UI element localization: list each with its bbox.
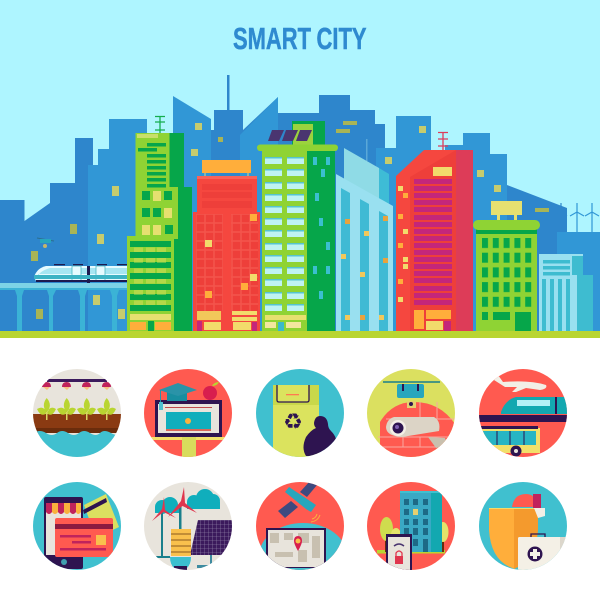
train (501, 397, 567, 414)
icon: drone and security camera (367, 369, 455, 457)
icon: smart farming (33, 369, 121, 457)
delivery drone (37, 238, 54, 248)
light bulb (170, 529, 191, 570)
apple (203, 382, 219, 400)
drone (383, 382, 440, 408)
ground strip (0, 331, 600, 338)
seedlings (37, 398, 116, 420)
sky background (0, 0, 600, 338)
satellite (278, 481, 320, 522)
red tower with stripes (396, 132, 473, 331)
bus (479, 426, 540, 456)
glass tower (336, 148, 393, 331)
helmet (512, 494, 545, 518)
icon: GPS satellite and map (256, 482, 344, 570)
small green office (473, 201, 540, 331)
first aid case (518, 534, 568, 570)
pale blue low building (539, 254, 593, 331)
icon: renewable energy (144, 482, 233, 570)
title: CITY (316, 22, 366, 56)
wind turbines (152, 487, 197, 558)
credit card (55, 518, 113, 557)
map tablet (266, 528, 326, 568)
shield (489, 508, 538, 569)
antenna (155, 116, 165, 133)
monorail train (34, 264, 128, 283)
icon: mobile commerce (33, 482, 121, 570)
wind turbines (555, 203, 599, 232)
graduation cap (159, 383, 197, 410)
clouds (155, 489, 220, 514)
solar panels (190, 520, 233, 568)
plane (494, 375, 546, 392)
solar-roof green tower (257, 121, 338, 331)
lit windows on back skyline (31, 121, 549, 319)
phone with lock (386, 534, 412, 570)
icon: transport (479, 369, 567, 457)
teal building (400, 491, 444, 552)
recycling symbol: ♻ (283, 410, 303, 435)
security camera (386, 417, 448, 448)
icon: safety and health (479, 482, 568, 570)
rooftop billboard (491, 201, 522, 221)
elevated railway bridge (0, 283, 130, 331)
icon: online education (144, 369, 232, 457)
back skyline (0, 75, 600, 331)
trees (380, 517, 448, 552)
title: SMART (233, 22, 311, 56)
grow lamps (42, 382, 111, 390)
icon: recycling bin (256, 369, 344, 457)
green tower (127, 116, 192, 331)
solar panels (268, 130, 312, 141)
icon: smart building and phone (367, 482, 455, 574)
rubbish bag (304, 416, 336, 456)
red building (193, 160, 260, 331)
rooftop sign (202, 160, 251, 176)
